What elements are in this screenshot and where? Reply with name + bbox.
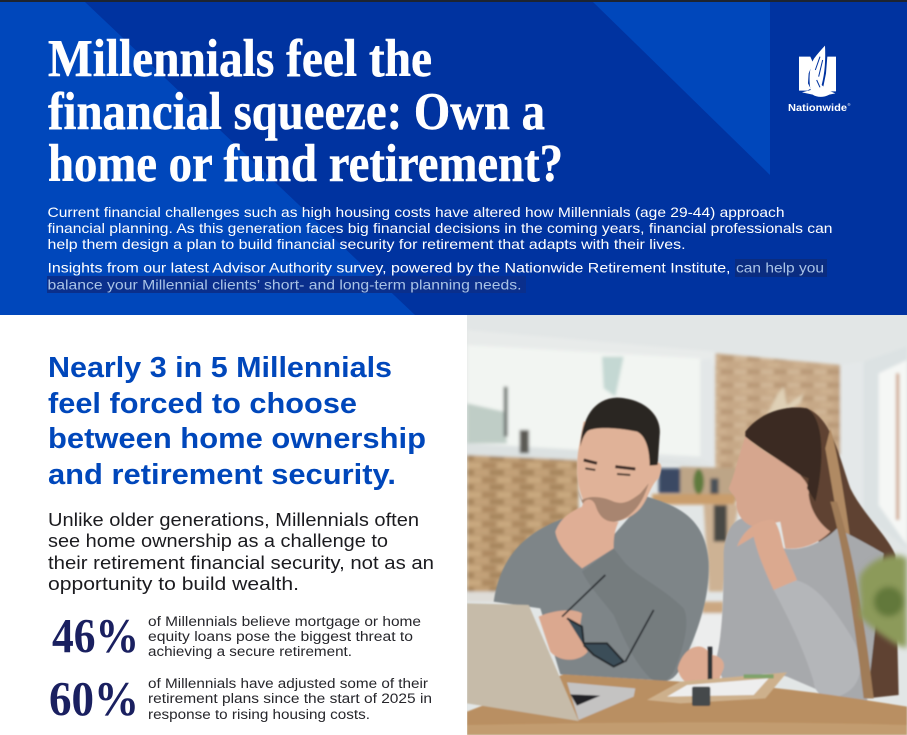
photo: couple at a laptop	[467, 315, 907, 735]
woman's face and neck	[729, 437, 830, 549]
stat: 60%: response to rising housing costs.	[148, 707, 370, 722]
survey paragraph with highlight: can help you	[736, 260, 824, 276]
title: financial squeeze: Own a	[48, 83, 545, 141]
survey paragraph with highlight: Insights from our latest Advisor Authority survey, powered by the Nationwide Retirement Institute,	[48, 260, 730, 276]
man's sweater	[494, 497, 709, 681]
title: Millennials feel the	[48, 30, 432, 88]
stat: 46%: achieving a secure retirement.	[148, 644, 352, 659]
woman's hair back	[745, 408, 899, 698]
heading: nearly 3 in 5: and retirement security.	[48, 459, 396, 491]
stat: 46%: of Millennials believe mortgage or home	[148, 614, 421, 629]
title	[48, 30, 563, 193]
title: home or fund retirement?	[48, 135, 563, 193]
woman's hand and pen	[676, 646, 724, 682]
intro paragraph: Current financial challenges such as high housing costs have altered how Millennials (age 29-44) approach	[48, 205, 784, 220]
woman's hand at chin	[737, 520, 797, 590]
table	[467, 674, 907, 726]
man's lower hand and glasses	[539, 610, 588, 660]
stat: 46%	[52, 608, 421, 663]
laptop	[567, 682, 635, 720]
stat: 46%: equity loans pose the biggest threat to	[148, 629, 413, 644]
logo: Nationwide: Nationwide	[788, 102, 847, 114]
heading: nearly 3 in 5: Nearly 3 in 5 Millennials	[48, 352, 392, 384]
man's hand at chin	[555, 500, 619, 568]
header banner	[0, 0, 907, 315]
intro paragraph: financial planning. As this generation faces big financial decisions in the coming years, financial professionals can	[48, 221, 832, 236]
survey paragraph with highlight	[47, 259, 827, 293]
intro paragraph: help them design a plan to build financial security for retirement that adapts with their lives.	[48, 237, 686, 252]
heading: nearly 3 in 5: between home ownership	[48, 423, 426, 455]
logo: Nationwide	[788, 46, 850, 114]
body paragraph: Unlike older generations, Millennials often	[48, 509, 419, 530]
man's head	[577, 422, 661, 521]
woman's sweater	[715, 518, 884, 702]
stat: 60%: of Millennials have adjusted some of their	[148, 676, 429, 691]
body paragraph: their retirement financial security, not as an	[48, 552, 434, 573]
survey paragraph with highlight: balance your Millennial clients’ short- and long-term planning needs.	[48, 278, 522, 292]
stat: 46%: 46%	[52, 608, 139, 663]
stat: 60%: 60%	[49, 671, 139, 726]
stat: 60%	[49, 671, 432, 726]
foreground plant	[859, 555, 907, 648]
body paragraph	[48, 509, 434, 594]
heading: nearly 3 in 5	[48, 352, 426, 491]
stat: 60%: retirement plans since the start of 2025 in	[148, 691, 432, 706]
body paragraph: opportunity to build wealth.	[48, 573, 299, 594]
clipboard	[647, 672, 787, 703]
logo: Nationwide: ®	[848, 102, 850, 107]
heading: nearly 3 in 5: feel forced to choose	[48, 388, 357, 420]
body paragraph: see home ownership as a challenge to	[48, 530, 388, 551]
intro paragraph	[48, 205, 832, 252]
